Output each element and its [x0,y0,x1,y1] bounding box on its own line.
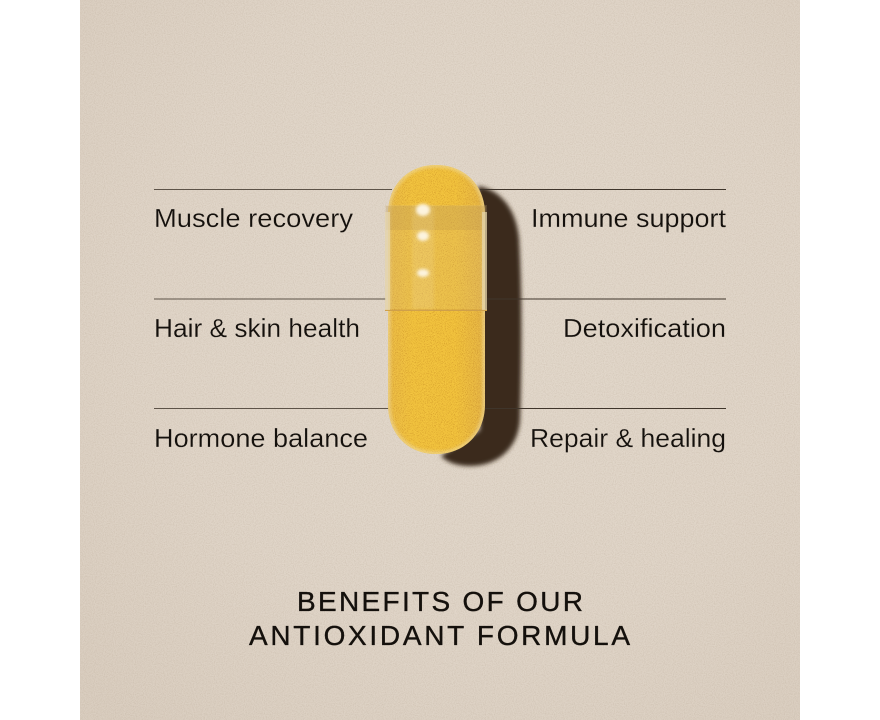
label: hormone balance: Hormone balance [154,423,368,453]
capsule powder fill [388,165,485,454]
left divider lines [154,190,392,408]
label: repair and healing: Repair & healing [530,423,726,453]
label: detoxification: Detoxification [563,313,726,343]
translucent upper shell [385,205,487,309]
title [249,586,630,651]
vertical shine [412,205,434,309]
powder texture [384,165,488,455]
label: muscle recovery: Muscle recovery [154,203,353,233]
shell right edge [482,212,487,310]
label: hair and skin health: Hair & skin health [154,313,360,343]
shell band [386,206,486,230]
right divider lines [480,190,726,408]
capsule [384,165,488,455]
highlights [416,204,430,277]
capsule shadow [441,186,521,466]
label: immune support: Immune support [531,203,727,233]
right benefits [530,203,727,453]
shell left edge [385,212,390,310]
left benefits [154,203,368,453]
shell seam [385,310,487,311]
title: ANTIOXIDANT FORMULA [249,620,630,651]
title: BENEFITS OF OUR [297,586,583,617]
capsule rim glow [388,165,485,454]
